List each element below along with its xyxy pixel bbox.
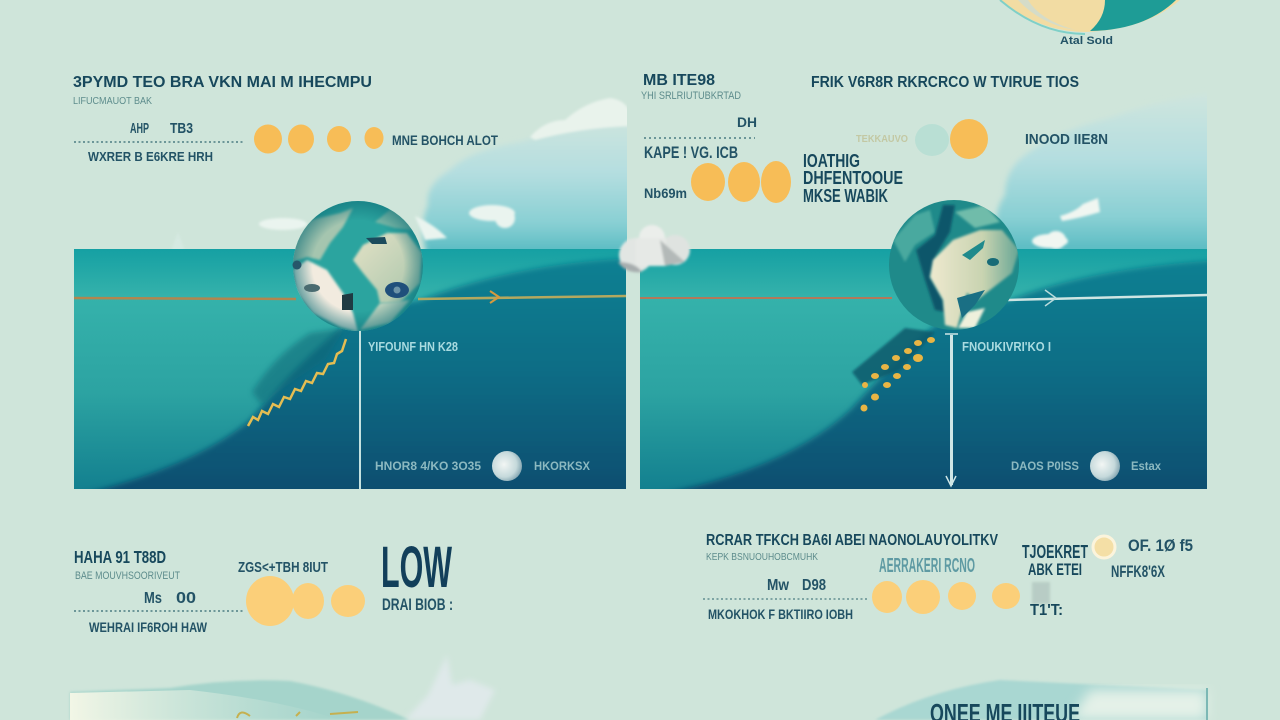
dots: top left xyxy=(254,124,384,154)
stat row: lower right: D98 xyxy=(802,577,826,594)
block: top left heading: 3PYMD TEO BRA VKN MAI M IHECMPU xyxy=(73,74,372,91)
stat row: lower right: MKOKHOK F BKTIIRO IOBH xyxy=(708,606,853,622)
big word LOW: LOW xyxy=(381,535,452,600)
icon: splash xyxy=(405,655,495,720)
globe left xyxy=(290,201,423,332)
subheading: BAE MOUVHSOORIVEUT xyxy=(75,570,180,582)
caption right ocean: DAOS P0ISS xyxy=(1011,459,1079,473)
stat row: top right xyxy=(644,114,757,201)
icon: moon right xyxy=(1090,451,1120,481)
text block: lower right stack: T1'T: xyxy=(1030,602,1063,619)
block: lower right heading xyxy=(706,532,998,563)
sky cloud right xyxy=(994,112,1207,249)
boat silhouette xyxy=(172,232,184,255)
squiggle decoration xyxy=(237,712,358,718)
text block: lower right stack xyxy=(1022,542,1088,619)
subheading: LIFUCMAUOT BAK xyxy=(73,96,152,107)
horizontal current arrow left xyxy=(74,291,626,303)
stat row: lower left: WEHRAI IF6ROH HAW xyxy=(89,619,208,635)
dots: lower right xyxy=(872,580,1020,614)
text block: lower right stack: TJOEKRET xyxy=(1022,542,1088,562)
stat row: top left: AHP xyxy=(130,120,149,137)
label left ocean: YIFOUNF HN K28 xyxy=(368,339,458,354)
stat row: lower left xyxy=(74,590,243,635)
subheading: YHI SRLRIUTUBKRTAD xyxy=(641,90,741,102)
dots text: top right: DHFENTOOUE xyxy=(803,168,903,188)
top globe fragment xyxy=(1000,0,1180,47)
dots: top right pair xyxy=(915,119,988,159)
label right ocean: FNOUKIVRI'KO I xyxy=(962,339,1051,354)
caption right ocean right: Estax xyxy=(1131,459,1161,473)
caption LOW: DRAI BIOB : xyxy=(382,595,453,614)
block: top left heading xyxy=(73,74,372,107)
label: lower right top: OF. 1Ø f5 xyxy=(1128,537,1193,555)
panel: right ocean scene xyxy=(630,92,1220,500)
stat row: lower right: Mw xyxy=(767,577,789,594)
block: lower left heading: HAHA 91 T88D xyxy=(74,547,166,567)
block: lower right heading: RCRAR TFKCH BA6I ABEI NAONOLAUYOLITKV xyxy=(706,532,998,549)
vertical arrow right xyxy=(945,334,958,486)
stat row: top right: Nb69m xyxy=(644,185,687,201)
block: lower left heading xyxy=(74,547,180,582)
icon: iceberg between panels xyxy=(618,225,690,272)
stat row: top left: WXRER B E6KRE HRH xyxy=(88,149,213,164)
stat row: lower left: 00 xyxy=(176,590,196,607)
caption left ocean right: HKORKSX xyxy=(534,459,590,473)
label: lower left dots: ZGS<+TBH 8IUT xyxy=(238,559,328,576)
caption left ocean: HNOR8 4/KO 3O35 xyxy=(375,459,481,473)
dots text: top right xyxy=(803,151,903,206)
panel: left ocean scene xyxy=(60,98,640,500)
small clouds left xyxy=(259,205,515,240)
label: lower right second: NFFK8'6X xyxy=(1111,562,1165,581)
dots text: top right: MKSE WABIK xyxy=(803,186,888,206)
bottom panel right xyxy=(875,680,1208,720)
dots text: top right: IOATHIG xyxy=(803,151,860,171)
arrows of yellow marks right xyxy=(860,337,935,412)
block: top right short heading: MB ITE98 xyxy=(643,72,715,89)
stat row: top right: KAPE ! VG. ICB xyxy=(644,143,738,162)
stat row: lower right xyxy=(703,577,868,622)
heading: top right: FRIK V6R8R RKRCRCO W TVIRUE TIOS xyxy=(811,74,1079,91)
small clouds right xyxy=(1032,198,1100,249)
stat row: top left: TB3 xyxy=(170,120,193,137)
block: top right short heading xyxy=(641,72,741,102)
dots: top right large xyxy=(691,161,791,203)
bottom panel left xyxy=(70,680,410,720)
top globe caption: Atal Sold xyxy=(1060,35,1113,47)
globe right xyxy=(889,200,1019,330)
dots: lower left xyxy=(246,576,365,626)
zigzag current left xyxy=(248,339,346,426)
icon: moon left xyxy=(492,451,522,481)
sky cloud left xyxy=(420,133,627,249)
vertical line left xyxy=(359,330,361,489)
label: top right pair: INOOD IIE8N xyxy=(1025,131,1108,148)
text block: lower right stack: ABK ETEI xyxy=(1028,560,1082,579)
ocean right xyxy=(630,249,1220,500)
dots label: top left: MNE BOHCH ALOT xyxy=(392,132,498,148)
ocean left xyxy=(60,249,640,500)
stat row: lower left: Ms xyxy=(144,590,162,607)
stat row: top left xyxy=(74,120,243,164)
horizontal current arrow right xyxy=(640,290,1207,306)
icon: sun xyxy=(1093,536,1115,558)
white cloud upper left panel xyxy=(530,98,630,140)
stat row: top right: DH xyxy=(737,114,757,130)
faint label: top right: TEKKAUVO xyxy=(856,134,908,145)
subheading: KEPK BSNUOUHOBCMUHK xyxy=(706,552,818,563)
label: lower right dots: AERRAKERI RCNO xyxy=(879,555,975,577)
